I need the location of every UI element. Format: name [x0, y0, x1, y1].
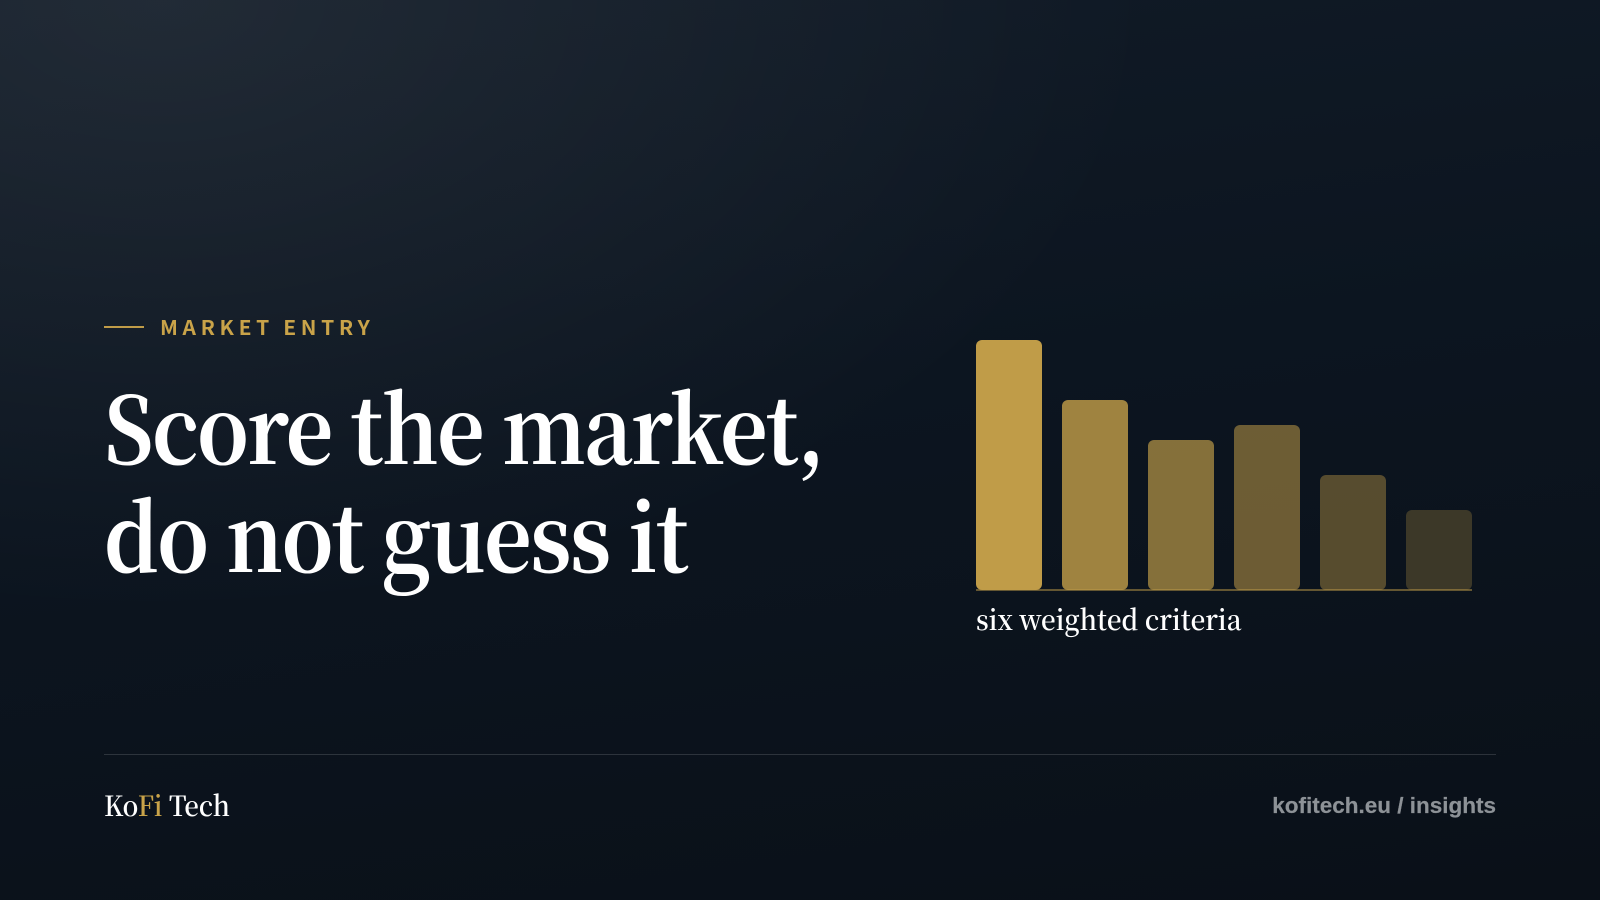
eyebrow label: MARKET ENTRY: [160, 312, 374, 341]
title: Score the market,: [104, 359, 823, 491]
footer divider: [104, 754, 1496, 755]
bar 2: [1062, 400, 1128, 590]
title: do not guess it: [104, 467, 687, 599]
bar 5: [1320, 475, 1386, 590]
eyebrow rule: [104, 326, 144, 328]
brand logo: KoFi Tech: [104, 785, 230, 825]
chart caption: six weighted criteria: [976, 599, 1242, 639]
bar 3: [1148, 440, 1214, 590]
bar 1: [976, 340, 1042, 590]
chart baseline: [976, 589, 1472, 591]
title: [104, 359, 823, 599]
bar 6: [1406, 510, 1472, 590]
bar chart: [976, 340, 1472, 591]
footer link: kofitech.eu / insights: [1272, 793, 1496, 818]
bar 4: [1234, 425, 1300, 590]
